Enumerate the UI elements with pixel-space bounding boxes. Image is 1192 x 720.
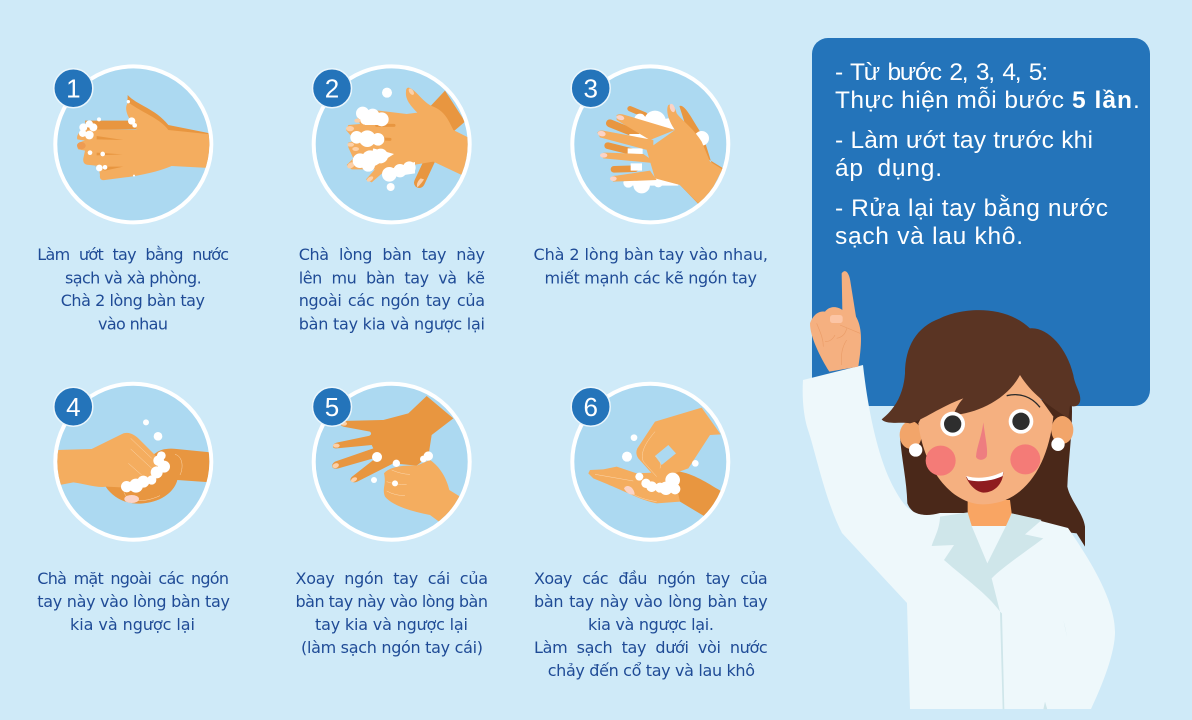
- illustration: circle and hands, step 5: [314, 384, 470, 540]
- eyebrow: [1007, 395, 1040, 407]
- step 2: [299, 66, 485, 333]
- caption step 4: Chà mặt ngoài các ngón: [37, 569, 229, 588]
- caption step 4: kia và ngược lại: [70, 615, 195, 634]
- earrings: [909, 438, 1065, 457]
- caption step 6: Làm sạch tay dưới vòi nước: [534, 638, 768, 657]
- face: [918, 370, 1053, 504]
- illustration: circle and hands, step 2: [314, 66, 470, 222]
- notes text: [835, 59, 1140, 250]
- number badge 3: 3: [583, 74, 598, 104]
- number badge 5: 5: [325, 392, 339, 422]
- number badge 3: [571, 69, 610, 108]
- notes text: .: [1133, 87, 1140, 114]
- caption step 4: tay này vào lòng bàn tay: [37, 592, 230, 611]
- notes text: Thực hiện mỗi bước: [835, 87, 1064, 114]
- number badge 2: 2: [325, 74, 339, 104]
- caption step 5: bàn tay này vào lòng bàn: [296, 592, 488, 611]
- caption step 2: ngoài các ngón tay của: [299, 291, 485, 310]
- caption step 3: miết mạnh các kẽ ngón tay: [544, 268, 757, 287]
- caption step 1: sạch và xà phòng.: [65, 268, 202, 287]
- illustration: circle and hands, step 4: [55, 384, 211, 540]
- caption step 4: [37, 569, 230, 634]
- caption step 2: Chà lòng bàn tay này: [299, 245, 485, 264]
- caption step 2: bàn tay kia và ngược lại: [299, 314, 485, 333]
- caption step 3: [534, 245, 768, 287]
- number badge 4: [54, 387, 93, 426]
- caption step 6: [534, 569, 768, 680]
- step 1: [37, 66, 229, 333]
- mouth: [966, 472, 1003, 493]
- caption step 2: lên mu bàn tay và kẽ: [299, 268, 485, 287]
- notes text: sạch và lau khô.: [835, 223, 1023, 250]
- coat collar and shirt: [932, 500, 1067, 709]
- nose: [976, 422, 987, 460]
- number badge 5: [312, 387, 352, 426]
- caption step 5: [296, 569, 488, 657]
- caption step 1: Làm ướt tay bằng nước: [37, 245, 229, 264]
- caption step 5: tay kia và ngược lại: [315, 615, 468, 634]
- illustration: circle and hands, step 1: [55, 66, 211, 222]
- eyes: [940, 409, 1033, 436]
- caption step 1: [37, 245, 229, 333]
- caption step 5: (làm sạch ngón tay cái): [301, 638, 483, 657]
- notes text: - Làm ướt tay trước khi: [835, 127, 1093, 154]
- notes text: áp dụng.: [835, 155, 942, 182]
- ears: [900, 416, 1073, 449]
- coat: [803, 365, 1115, 709]
- number badge 6: 6: [583, 392, 598, 422]
- caption step 1: vào nhau: [98, 314, 168, 333]
- character: doctor pointing up: [803, 271, 1115, 709]
- caption step 6: chảy đến cổ tay và lau khô: [548, 661, 755, 680]
- step 3: [534, 66, 768, 287]
- caption step 6: Xoay các đầu ngón tay của: [534, 569, 768, 588]
- caption step 6: kia và ngược lại.: [588, 615, 714, 634]
- number badge 4: 4: [66, 392, 81, 422]
- caption step 5: Xoay ngón tay cái của: [296, 569, 488, 588]
- number badge 1: 1: [66, 74, 81, 104]
- illustration: circle and hands, step 6: [572, 384, 728, 540]
- caption step 6: bàn tay này vào lòng bàn tay: [534, 592, 768, 611]
- illustration: circle and hands, step 3: [572, 66, 728, 222]
- number badge 2: [312, 69, 352, 108]
- caption step 2: [299, 245, 485, 333]
- hair front: [882, 310, 1080, 423]
- hand pointing: [810, 271, 861, 372]
- caption step 3: Chà 2 lòng bàn tay vào nhau,: [534, 245, 768, 264]
- notes text: - Rửa lại tay bằng nước: [835, 195, 1108, 222]
- number badge 6: [571, 387, 610, 426]
- step 6: [534, 384, 768, 680]
- head: [882, 310, 1080, 504]
- notes text: 5 lần: [1072, 87, 1132, 114]
- step 4: [37, 384, 230, 634]
- panel: notes: [812, 38, 1150, 406]
- caption step 1: Chà 2 lòng bàn tay: [61, 291, 205, 310]
- step 5: [296, 384, 488, 657]
- notes text: - Từ bước 2, 3, 4, 5:: [835, 59, 1048, 86]
- hair back: [900, 400, 1085, 547]
- cheeks: [926, 444, 1040, 476]
- number badge 1: [54, 69, 93, 108]
